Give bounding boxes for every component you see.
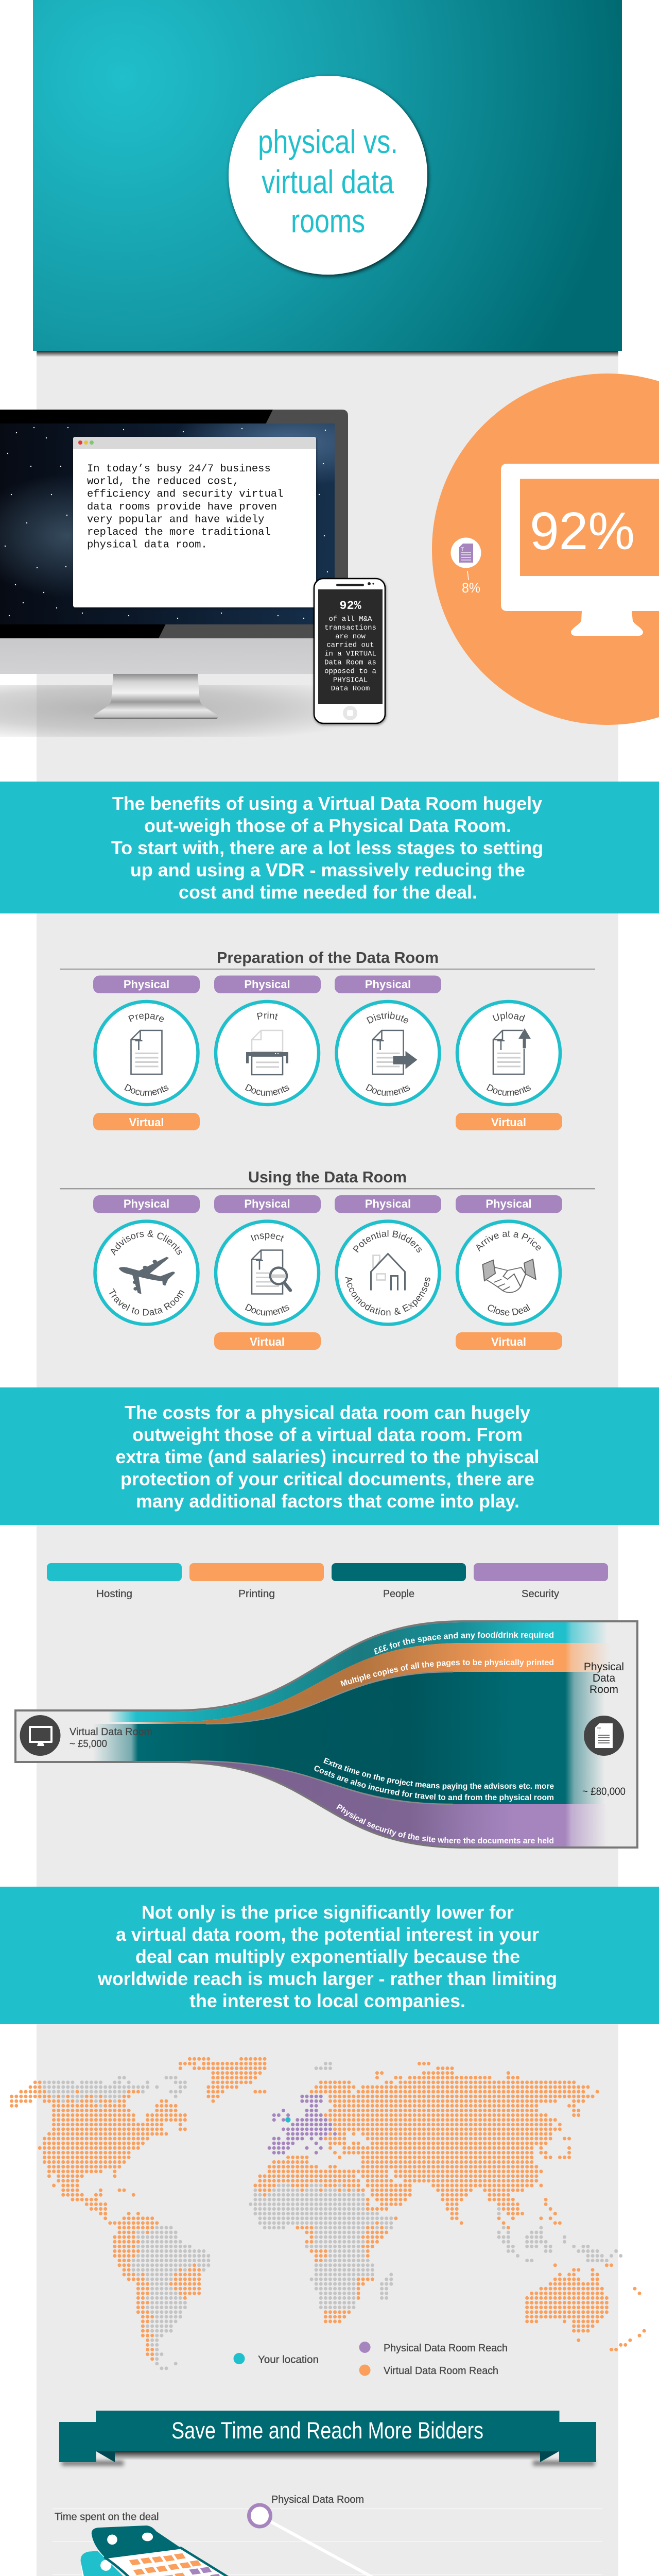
pills: virtual row 1: Virtual: [491, 1116, 526, 1129]
teal text band: benefits: out-weigh those of a Physical Data Room.: [144, 815, 511, 836]
step: prepare documents: [93, 999, 200, 1107]
browser window with intro text: very popular and have widely: [87, 514, 264, 526]
teal text band: costs: extra time (and salaries) incurred to the phyiscal: [115, 1446, 540, 1467]
desktop computer illustration: [0, 410, 348, 737]
smartphone with statistic: opposed to a: [324, 667, 376, 675]
pills: virtual row 2: Virtual: [250, 1335, 285, 1348]
pills: virtual row 1: Virtual: [129, 1116, 164, 1129]
ribbon heading: [59, 2411, 596, 2466]
title badge: virtual data: [262, 163, 394, 200]
step: close deal: [457, 1221, 560, 1324]
browser window with intro text: In today’s busy 24/7 business: [87, 463, 271, 475]
browser window with intro text: efficiency and security virtual: [87, 488, 283, 500]
physical data room label and icon: [582, 1661, 626, 1798]
step: travel to data room: [93, 1219, 200, 1326]
virtual data room label and icon: [20, 1715, 152, 1756]
virtual data room label and icon: Virtual Data Room: [70, 1726, 152, 1738]
step: travel to data room: Advisors & Clients: [111, 1230, 182, 1256]
cost legend: [47, 1563, 608, 1600]
teal text band: benefits: cost and time needed for the deal.: [179, 882, 477, 903]
section: preparation of the data room: [60, 948, 595, 1130]
pills: physical row 1: Physical: [244, 978, 290, 991]
smartphone with statistic: Data Room as: [324, 658, 376, 667]
step: distribute documents: [335, 999, 441, 1107]
browser window with intro text: data rooms provide have proven: [87, 501, 277, 513]
pills: virtual row 2: Virtual: [491, 1335, 526, 1348]
step: travel to data room: Travel to Data Room: [109, 1288, 184, 1316]
title badge: physical vs.: [258, 123, 398, 160]
cost legend: Hosting: [96, 1588, 132, 1600]
smartphone with statistic: PHYSICAL: [333, 676, 368, 684]
physical data room label and icon: Data: [593, 1672, 615, 1684]
browser window with intro text: [73, 437, 316, 607]
teal text band: reach: worldwide reach is much larger - rather than limiting: [97, 1968, 557, 1989]
step: upload documents: Documents: [486, 1084, 531, 1096]
step: distribute documents: Documents: [366, 1084, 410, 1096]
step: prepare documents: Documents: [124, 1084, 169, 1096]
step: inspect documents: Inspect: [250, 1233, 284, 1242]
physical data room label and icon: Room: [589, 1684, 618, 1696]
title badge: rooms: [291, 202, 365, 240]
icon: monitor with 92%: 92%: [530, 501, 635, 561]
heading: using: Using the Data Room: [248, 1168, 407, 1186]
teal text band: costs: The costs for a physical data room can hugely: [125, 1402, 530, 1423]
smartphone with statistic: [314, 579, 385, 723]
step: accommodation and expenses: [337, 1221, 440, 1324]
sankey labels: Physical security of the site where the documents are held: [336, 1804, 553, 1843]
sankey labels: Extra time on the project means paying the advisors etc. more: [323, 1758, 554, 1791]
cost legend: Security: [522, 1588, 559, 1600]
your location marker: [285, 2117, 290, 2123]
teal text band: costs: [0, 1387, 659, 1525]
step: accommodation and expenses: Accomodation & Expenses: [345, 1277, 430, 1316]
sankey chart: cost comparison: [15, 1621, 637, 1848]
smartphone with statistic: of all M&A: [328, 615, 372, 623]
teal text band: reach: the interest to local companies.: [189, 1990, 465, 2011]
map legend: Your location: [258, 2354, 319, 2366]
browser window with intro text: physical data room.: [87, 539, 207, 551]
sankey labels: Multiple copies of all the pages to be physically printed: [340, 1659, 553, 1687]
teal text band: reach: [0, 1887, 659, 2024]
step: inspect documents: Documents: [245, 1303, 289, 1316]
teal text band: reach: deal can multiply exponentially because the: [135, 1946, 520, 1967]
browser window with intro text: replaced the more traditional: [87, 527, 271, 538]
smartphone with statistic: transactions: [324, 624, 376, 632]
pills: physical row 1: Physical: [124, 978, 169, 991]
icon: document 8 percent: 8%: [462, 580, 480, 596]
grey page background: [37, 351, 618, 2576]
pills: virtual row 1: [93, 1113, 562, 1130]
line chart: time versus bidders: Time spent on the deal: [55, 2511, 159, 2522]
step: upload documents: Upload: [492, 1012, 525, 1022]
step: print documents: [214, 999, 320, 1107]
header panel: [33, 0, 622, 357]
sankey labels: [313, 1631, 554, 1845]
pills: physical row 2: Physical: [124, 1197, 169, 1210]
teal text band: benefits: To start with, there are a lot less stages to setting: [111, 837, 543, 858]
teal text band: benefits: [0, 782, 659, 913]
step: inspect documents: [214, 1219, 320, 1326]
map legend: [234, 2342, 508, 2377]
heading: preparation: Preparation of the Data Room: [217, 948, 439, 967]
teal text band: costs: protection of your critical documents, there are: [120, 1468, 534, 1489]
step: upload documents: [455, 999, 562, 1107]
teal text band: costs: many additional factors that come into play.: [136, 1490, 519, 1512]
icon: monitor with 92%: [501, 464, 659, 636]
orange stat circle 92 percent: [432, 374, 659, 725]
physical data room label and icon: Physical: [584, 1661, 624, 1673]
physical data room label and icon: ~ £80,000: [582, 1786, 626, 1798]
teal text band: costs: outweight those of a virtual data room. From: [132, 1424, 523, 1445]
ribbon heading: Save Time and Reach More Bidders: [171, 2417, 483, 2444]
pills: physical row 1: Physical: [365, 978, 411, 991]
pills: physical row 1: [93, 976, 441, 993]
cost legend: People: [383, 1588, 414, 1600]
smartphone with statistic: Data Room: [331, 685, 370, 693]
step: print documents: Documents: [245, 1084, 289, 1096]
virtual data room label and icon: ~ £5,000: [70, 1738, 107, 1750]
smartphone with statistic: carried out: [326, 641, 374, 650]
browser window with intro text: world, the reduced cost,: [87, 476, 239, 488]
step: accommodation and expenses: Potential Bidders: [353, 1230, 422, 1253]
smartphone with statistic: 92%: [339, 599, 362, 613]
pills: physical row 2: Physical: [365, 1197, 411, 1210]
smartphone with statistic: are now: [335, 633, 366, 641]
cost legend: Printing: [238, 1588, 275, 1600]
sankey labels: £££ for the space and any food/drink required: [374, 1632, 553, 1655]
dot-matrix world map: [12, 2059, 644, 2368]
title badge: [229, 76, 427, 275]
teal text band: reach: a virtual data room, the potential interest in your: [116, 1924, 539, 1945]
step: print documents: Print: [257, 1012, 278, 1020]
teal text band: benefits: up and using a VDR - massively reducing the: [130, 859, 525, 880]
map legend: Virtual Data Room Reach: [384, 2365, 498, 2377]
step: prepare documents: Prepare: [128, 1013, 164, 1022]
step: close deal: Arrive at a Price: [476, 1230, 541, 1252]
map legend: Physical Data Room Reach: [384, 2343, 508, 2354]
step: close deal: Close Deal: [488, 1303, 530, 1316]
step: distribute documents: Distribute: [367, 1012, 409, 1024]
pills: physical row 2: Physical: [485, 1197, 532, 1210]
line chart: time versus bidders: [53, 2494, 602, 2576]
pills: physical row 2: [93, 1195, 562, 1213]
section: using the data room: [60, 1168, 595, 1350]
icon: calendars: [81, 2526, 239, 2576]
pills: virtual row 2: [214, 1332, 562, 1350]
sankey labels: Costs are also incurred for travel to and from the physical room: [314, 1766, 553, 1802]
teal text band: reach: Not only is the price significantly lower for: [142, 1902, 514, 1923]
smartphone with statistic: in a VIRTUAL: [324, 650, 376, 658]
line chart: time versus bidders: Physical Data Room: [271, 2494, 364, 2505]
icon: document 8 percent: [451, 538, 481, 596]
teal text band: benefits: The benefits of using a Virtual Data Room hugely: [112, 793, 542, 814]
pills: physical row 2: Physical: [244, 1197, 290, 1210]
